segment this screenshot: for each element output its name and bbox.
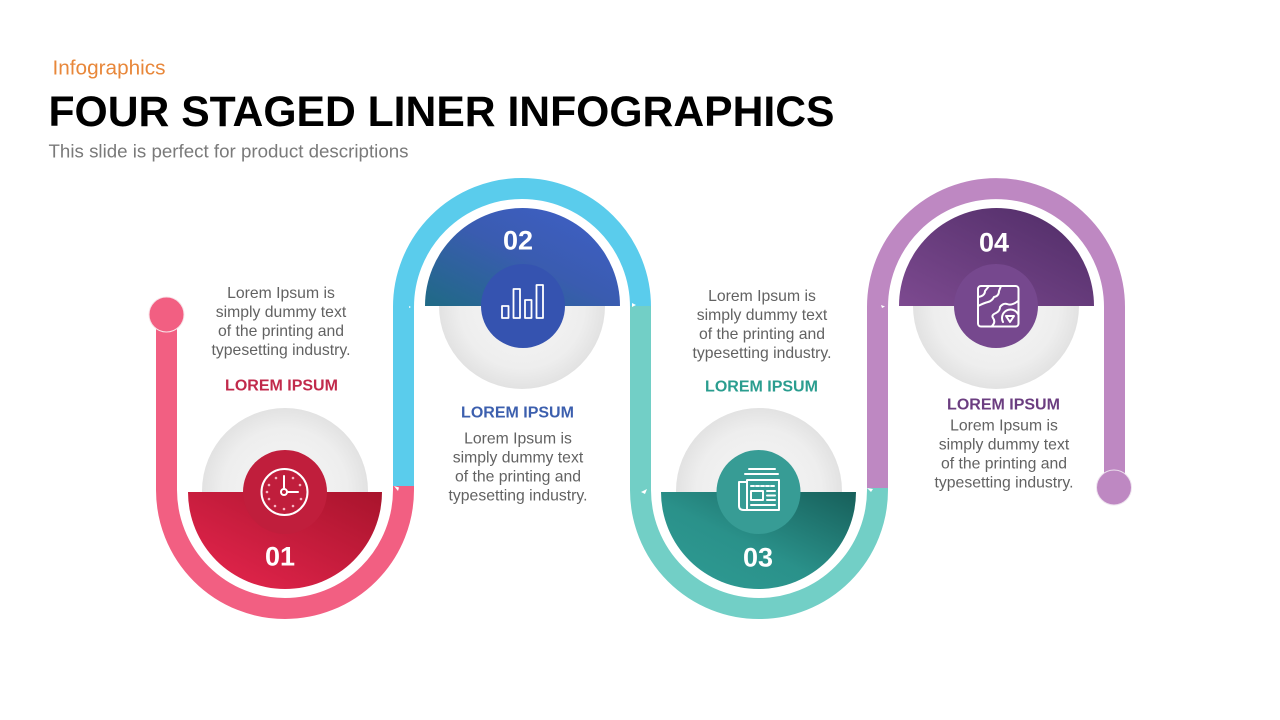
half disc 3 xyxy=(661,492,856,589)
stage 4 xyxy=(899,208,1094,492)
heading 2: LOREM IPSUM xyxy=(461,404,574,422)
body text 4: of the printing and xyxy=(941,456,1067,472)
title: FOUR STAGED LINER INFOGRAPHICS xyxy=(48,88,834,136)
half disc 4 xyxy=(899,208,1094,306)
track: stage 3 teal U xyxy=(640,306,878,608)
number 04: 04 xyxy=(979,228,1009,258)
number 02: 02 xyxy=(503,226,533,256)
heading 1: LOREM IPSUM xyxy=(225,378,338,394)
grey disc 4 xyxy=(913,223,1079,389)
track: stage 1 pink U xyxy=(166,314,404,608)
body text 4: Lorem Ipsum is xyxy=(950,418,1058,434)
icon: bar chart xyxy=(502,285,543,318)
body text 3: of the printing and xyxy=(699,326,825,343)
body text 3: Lorem Ipsum is xyxy=(708,288,816,305)
half disc 2 xyxy=(425,208,620,306)
half disc 1 xyxy=(188,492,382,589)
heading 3: LOREM IPSUM xyxy=(705,378,818,396)
body text 1: typesetting industry. xyxy=(212,342,350,359)
grey disc 1 xyxy=(202,408,368,574)
icon: map xyxy=(978,286,1018,326)
icon circle 4 xyxy=(954,264,1038,348)
icon circle 2 xyxy=(481,264,565,348)
stage 3 xyxy=(661,288,856,589)
track: stage 4 purple arch xyxy=(878,189,1114,489)
kicker: Infographics: Infographics xyxy=(52,58,166,80)
body text 1: of the printing and xyxy=(218,323,344,340)
body text 1: simply dummy text xyxy=(216,304,347,321)
body text 2: Lorem Ipsum is xyxy=(464,430,572,448)
body text 3: simply dummy text xyxy=(697,307,828,324)
subtitle: This slide is perfect for product descriptions xyxy=(48,140,408,162)
grey disc 2 xyxy=(439,223,605,389)
icon: clock xyxy=(262,469,308,515)
body text 2: typesetting industry. xyxy=(449,488,587,504)
stage 1 xyxy=(188,285,382,589)
body text 3: typesetting industry. xyxy=(693,345,831,362)
heading 4: LOREM IPSUM xyxy=(947,396,1060,414)
icon: newspaper xyxy=(739,469,779,510)
start node: pink dot xyxy=(149,297,184,332)
stage 2 xyxy=(425,208,620,504)
body text 1: Lorem Ipsum is xyxy=(227,285,335,302)
body text 4: simply dummy text xyxy=(939,436,1070,454)
icon circle 1 xyxy=(243,450,327,534)
number 03: 03 xyxy=(743,542,773,572)
number 01: 01 xyxy=(265,542,295,572)
icon circle 3 xyxy=(716,450,800,534)
joint nicks xyxy=(394,303,885,494)
track: stage 2 blue arch xyxy=(404,188,640,489)
grey disc 3 xyxy=(676,408,842,574)
body text 4: typesetting industry. xyxy=(935,474,1073,492)
end node: purple dot xyxy=(1096,470,1132,505)
body text 2: of the printing and xyxy=(455,468,581,486)
body text 2: simply dummy text xyxy=(453,450,584,466)
